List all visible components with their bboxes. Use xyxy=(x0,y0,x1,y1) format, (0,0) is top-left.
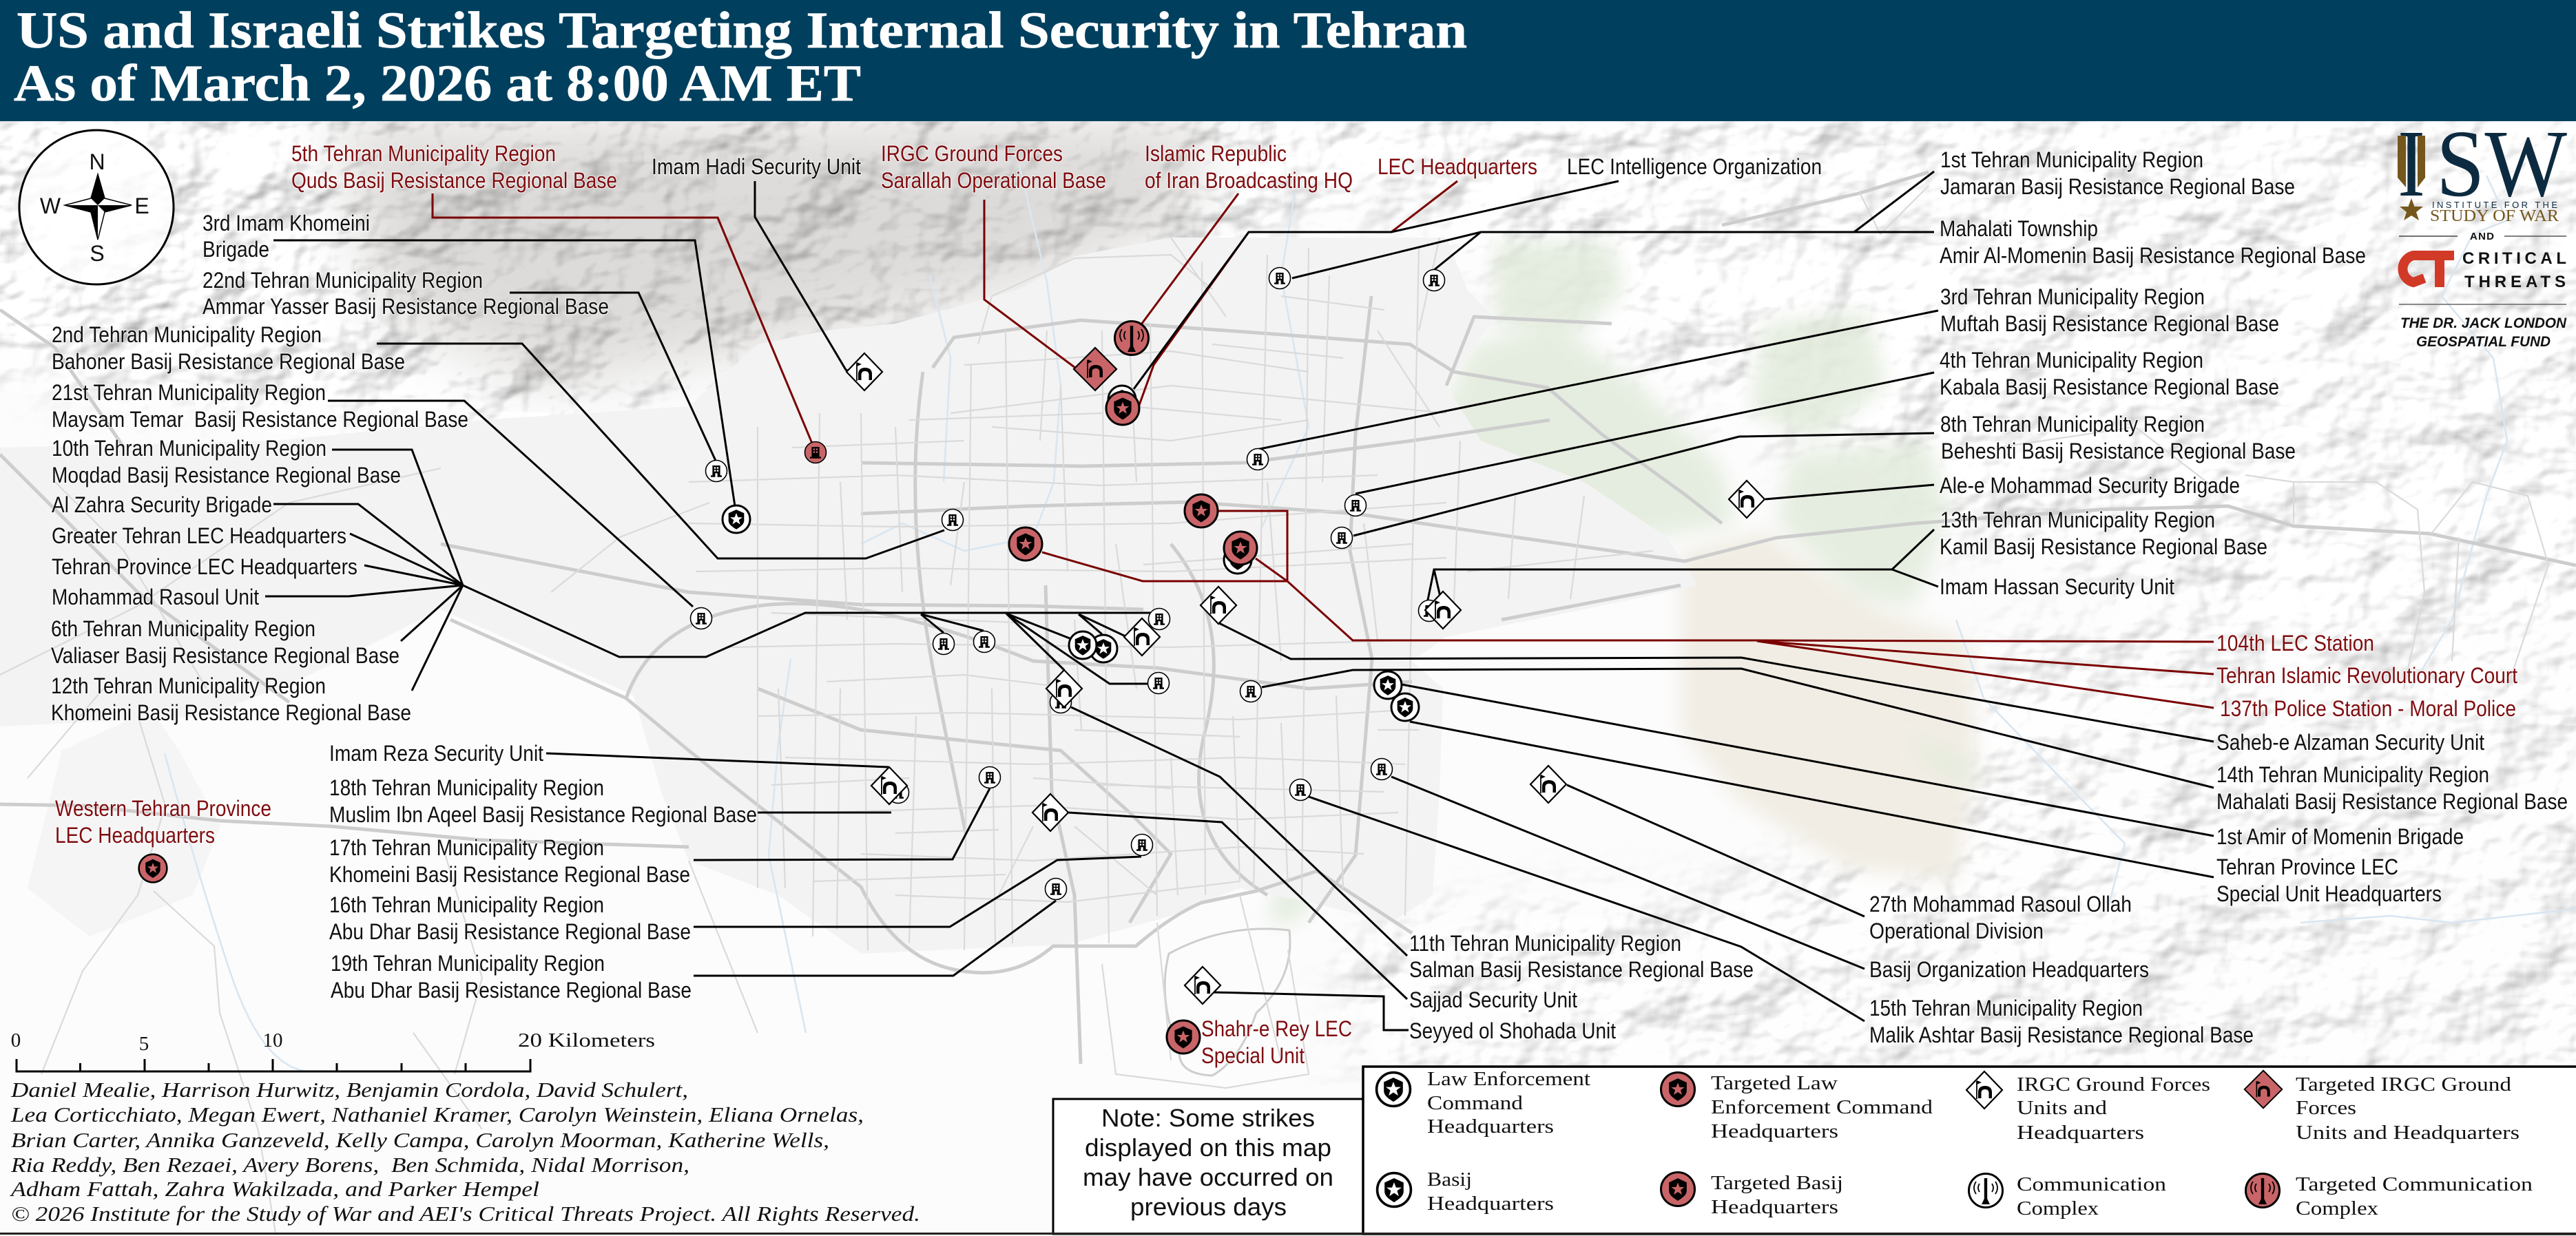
label: 27th: 27th Mohammad Rasoul Ollah xyxy=(1869,892,2132,916)
title xyxy=(14,2,1467,112)
label: 10th: 10th Tehran Municipality Region xyxy=(52,436,326,461)
note box: previous days xyxy=(1130,1193,1287,1221)
leader: Sajjad xyxy=(1068,813,1407,999)
legend item: targeted basij: Headquarters xyxy=(1711,1196,1838,1218)
label: 1st Amir: 1st Amir of Momenin Brigade xyxy=(2216,824,2464,849)
label: LEC HQ: LEC Headquarters xyxy=(1378,154,1537,179)
label: 12th: 12th Tehran Municipality Region xyxy=(51,673,326,698)
icon: targeted communication xyxy=(1114,321,1149,355)
credits: Adham Fattah, Zahra Wakilzada, and Parker Hempel xyxy=(10,1177,539,1201)
legend xyxy=(1363,1067,2576,1234)
leaders: 1st Jamaran and Mahalati Township xyxy=(1292,171,1934,278)
label: 13th Kamil: 13th Tehran Municipality Region xyxy=(1940,507,2215,532)
legend item: law enforcement xyxy=(1377,1068,1590,1138)
legend item: targeted communication: Targeted Communication xyxy=(2296,1173,2533,1195)
label: Mohammad Rasoul: Mohammad Rasoul Unit xyxy=(52,585,259,609)
legend item: law enforcement: Law Enforcement xyxy=(1427,1068,1590,1090)
legend item: targeted basij: Targeted Basij xyxy=(1711,1172,1843,1194)
leader: 5th Tehran Municipality Region xyxy=(433,193,813,445)
label: 1st Jamaran xyxy=(1940,147,2295,199)
title: As of March 2, 2026 at 8:00 AM ET xyxy=(14,55,861,112)
credits: © 2026 Institute for the Study of War and AEI's Critical Threats Project. All Rights Reserved. xyxy=(11,1202,920,1226)
label: 13th Kamil xyxy=(1940,507,2267,559)
leader: Ale-e Mohammad xyxy=(1765,485,1934,499)
compass xyxy=(19,130,174,284)
note box: may have occurred on xyxy=(1083,1163,1333,1191)
label: Shahr-e Rey: Special Unit xyxy=(1201,1043,1305,1068)
label: 19th: Abu Dhar Basij Resistance Regional Base xyxy=(331,978,692,1003)
leader: central trunk xyxy=(463,585,1152,684)
label: 10th xyxy=(52,436,401,488)
label: IRGC Sarallah: Sarallah Operational Base xyxy=(881,168,1106,193)
logo: ISW: STUDY OF WAR xyxy=(2430,207,2559,225)
label: Seyyed: Seyyed ol Shohada Unit xyxy=(1409,1018,1616,1043)
label: 21st: Maysam Temar Basij Resistance Regional Base xyxy=(52,407,468,432)
label: 4th Kabala: Kabala Basij Resistance Regional Base xyxy=(1940,375,2279,399)
label: LEC Intelligence: LEC Intelligence Organization xyxy=(1567,154,1822,179)
scale bar: 0 xyxy=(11,1029,21,1051)
label: 21st: 21st Tehran Municipality Region xyxy=(52,380,326,405)
note box: Note: Some strikes xyxy=(1101,1104,1315,1132)
credits: Daniel Mealie, Harrison Hurwitz, Benjamin Cordola, David Schulert, xyxy=(10,1078,688,1102)
leader: 17th xyxy=(694,788,990,860)
legend item: targeted law enforcement xyxy=(1661,1072,1933,1142)
label: 14th xyxy=(2216,762,2568,814)
leader: Province LEC Special Unit xyxy=(1410,722,2214,877)
label: Broadcasting xyxy=(1145,141,1353,193)
label: 2nd xyxy=(52,322,405,374)
compass: W xyxy=(40,193,61,218)
label: Greater Tehran: Greater Tehran LEC Headquarters xyxy=(52,523,346,548)
label: 21st xyxy=(52,380,468,432)
label: 22nd: 22nd Tehran Municipality Region xyxy=(202,268,483,293)
label: Broadcasting: of Iran Broadcasting HQ xyxy=(1145,168,1353,193)
legend item: basij: Basij xyxy=(1427,1169,1472,1191)
labels: east xyxy=(1201,147,2568,1068)
main roads xyxy=(0,172,2576,1076)
leader: 19th xyxy=(694,901,1056,976)
scale bar: 10 xyxy=(263,1029,282,1051)
leader: Broadcasting HQ xyxy=(1141,193,1238,324)
leader: 3rd Muftah xyxy=(1256,311,1938,450)
logo: Critical Threats xyxy=(2399,249,2566,304)
leader: 22nd xyxy=(510,293,716,461)
leader: 14th Mahalati xyxy=(1262,669,2214,788)
label: 1st Jamaran: Jamaran Basij Resistance Regional Base xyxy=(1940,174,2295,199)
label: Court: Tehran Islamic Revolutionary Court xyxy=(2216,663,2517,688)
label: 3rd Imam Khomeini xyxy=(202,211,370,262)
labels: west xyxy=(51,211,757,1003)
logo: ISW xyxy=(2398,111,2567,225)
leader: 3rd Imam Khomeini xyxy=(273,240,735,506)
label: Mahalati Township: Amir Al-Momenin Basij Resistance Regional Base xyxy=(1940,243,2366,268)
labels: north xyxy=(291,141,1822,193)
label: 12th: Khomeini Basij Resistance Regional Base xyxy=(51,700,411,725)
label: 5th Quds Basij: 5th Tehran Municipality Region xyxy=(291,141,556,166)
note box: displayed on this map xyxy=(1085,1133,1331,1162)
label: 8th Beheshti: Beheshti Basij Resistance Regional Base xyxy=(1941,439,2296,463)
label: 13th Kamil: Kamil Basij Resistance Regional Base xyxy=(1940,534,2267,559)
legend item: IRGC: IRGC Ground Forces xyxy=(2017,1073,2210,1096)
header bar xyxy=(0,0,2576,121)
logo: ISW: I xyxy=(2398,111,2425,217)
icon: buildings xyxy=(690,267,1445,899)
leader: Imam Reza xyxy=(546,753,889,767)
label: Broadcasting: Islamic Republic xyxy=(1145,141,1287,166)
credits: Ria Reddy, Ben Rezaei, Avery Borens, Ben Schmida, Nidal Morrison, xyxy=(10,1153,689,1177)
leader: 2nd xyxy=(377,344,944,558)
legend item: IRGC xyxy=(1966,1071,2210,1144)
label: Sajjad: Sajjad Security Unit xyxy=(1409,987,1577,1012)
label: 17th: 17th Tehran Municipality Region xyxy=(329,835,604,860)
icon: white shields xyxy=(723,386,1419,721)
legend item: law enforcement: Headquarters xyxy=(1427,1115,1554,1138)
logos xyxy=(2398,111,2567,350)
label: 10th: Moqdad Basij Resistance Regional Base xyxy=(52,463,401,488)
city built-up area xyxy=(0,238,1698,954)
leader: 1st Amir of Momenin xyxy=(1402,684,2214,836)
label: 17th xyxy=(329,835,690,887)
label: 6th: Valiaser Basij Resistance Regional Base xyxy=(51,643,399,668)
logo: Jack London fund: GEOSPATIAL FUND xyxy=(2416,334,2551,350)
label: Mahalati Township xyxy=(1940,216,2366,268)
label: Mahalati Township: Mahalati Township xyxy=(1940,216,2098,241)
label: 3rd Muftah xyxy=(1940,284,2279,336)
compass: N xyxy=(89,149,105,174)
leader lines xyxy=(265,171,2214,1030)
label: 5th Quds Basij xyxy=(291,141,617,193)
legend item: targeted IRGC: Targeted IRGC Ground xyxy=(2296,1073,2512,1096)
leaders: 13th Kamil and Imam Hassan xyxy=(1426,530,1938,609)
map markers xyxy=(139,267,1765,1054)
legend item: communication xyxy=(1969,1173,2167,1219)
logo: ISW: SW xyxy=(2436,111,2567,217)
legend item: targeted IRGC: Units and Headquarters xyxy=(2296,1122,2520,1144)
label: 15th: 15th Tehran Municipality Region xyxy=(1869,996,2143,1020)
label: 11th: 11th Tehran Municipality Region xyxy=(1409,931,1681,956)
leader: LEC Headquarters xyxy=(1139,181,1457,407)
label: Western Tehran: Western Tehran Province xyxy=(55,796,271,821)
label: 19th: 19th Tehran Municipality Region xyxy=(331,951,605,976)
label: Tehran Province: Tehran Province LEC Headquarters xyxy=(52,554,357,579)
legend item: targeted law enforcement: Enforcement Command xyxy=(1711,1096,1933,1118)
label: 4th Kabala xyxy=(1940,348,2279,399)
vegetation patches xyxy=(551,241,1984,923)
label: 12th xyxy=(51,673,411,725)
rivers xyxy=(165,165,2576,1071)
label: 11th: Salman Basij Resistance Regional Base xyxy=(1409,957,1754,982)
label: 16th: Abu Dhar Basij Resistance Regional Base xyxy=(329,919,691,944)
scale bar: 20 Kilometers xyxy=(518,1029,655,1051)
label: 6th xyxy=(51,616,399,668)
label: 27th xyxy=(1869,892,2132,943)
credits xyxy=(10,1078,920,1226)
title: US and Israeli Strikes Targeting Internal Security in Tehran xyxy=(17,2,1467,59)
label: Shahr-e Rey xyxy=(1201,1016,1352,1068)
label: 18th: Muslim Ibn Aqeel Basij Resistance Regional Base xyxy=(329,802,757,827)
label: 3rd Imam Khomeini: Brigade xyxy=(202,237,269,262)
leader: Imam Hadi xyxy=(755,181,854,373)
tan desert area xyxy=(1295,262,1977,881)
leader: Seyyed ol Shohada xyxy=(1212,992,1409,1030)
logo: Critical Threats: THREATS xyxy=(2464,273,2566,291)
leader: 16th xyxy=(694,857,1141,927)
label: Saheb-e: Saheb-e Alzaman Security Unit xyxy=(2216,730,2484,755)
label: Province LEC Special Unit xyxy=(2216,855,2442,906)
legend item: IRGC: Headquarters xyxy=(2017,1122,2144,1144)
label: IRGC Sarallah xyxy=(881,141,1106,193)
legend item: targeted communication xyxy=(2245,1173,2533,1219)
label: Imam Hadi: Imam Hadi Security Unit xyxy=(652,154,861,179)
label: 19th xyxy=(331,951,692,1003)
leader: LEC Intelligence Organization xyxy=(1134,181,1619,389)
leaders: west hub xyxy=(265,450,463,691)
logo: Critical Threats: CRITICAL xyxy=(2462,249,2566,268)
leader: 8th Beheshti xyxy=(1353,433,1934,536)
label: 16th xyxy=(329,892,691,944)
label: Province LEC Special Unit: Tehran Province LEC xyxy=(2216,855,2398,879)
legend item: targeted communication: Complex xyxy=(2296,1197,2379,1219)
label: 3rd Imam Khomeini: 3rd Imam Khomeini xyxy=(202,211,370,235)
label: 4th Kabala: 4th Tehran Municipality Region xyxy=(1940,348,2203,373)
label: 2nd: 2nd Tehran Municipality Region xyxy=(52,322,322,347)
icon: targeted IRGC xyxy=(1074,348,1116,390)
logo: Jack London fund: THE DR. JACK LONDON xyxy=(2400,315,2567,331)
legend item: IRGC: Units and xyxy=(2017,1097,2108,1119)
label: 3rd Muftah: 3rd Tehran Municipality Region xyxy=(1940,284,2205,309)
logo: Jack London fund xyxy=(2400,315,2567,350)
leader: Basij Organization xyxy=(1391,777,1865,969)
scale bar xyxy=(11,1029,655,1071)
label: 17th: Khomeini Basij Resistance Regional Base xyxy=(329,862,690,887)
label: 3rd Muftah: Muftah Basij Resistance Regional Base xyxy=(1940,311,2279,336)
note box xyxy=(1053,1099,1363,1234)
label: Ale-e Mohammad: Ale-e Mohammad Security Brigade xyxy=(1940,473,2240,498)
leaders: 104th, court, 137th xyxy=(1042,511,2214,708)
label: 5th Quds Basij: Quds Basij Resistance Regional Base xyxy=(291,168,617,193)
legend item: targeted basij xyxy=(1661,1172,1843,1218)
label: Shahr-e Rey: Shahr-e Rey LEC xyxy=(1201,1016,1352,1041)
label: 1st Jamaran: 1st Tehran Municipality Region xyxy=(1940,147,2203,172)
leader: 27th Division xyxy=(1567,785,1865,916)
leader: 18th xyxy=(758,811,891,814)
legend item: basij xyxy=(1378,1169,1554,1215)
label: 15th: Malik Ashtar Basij Resistance Regional Base xyxy=(1869,1023,2254,1047)
label: 137th: 137th Police Station - Moral Police xyxy=(2220,696,2516,721)
label: 22nd xyxy=(202,268,609,319)
label: 18th xyxy=(329,775,757,827)
label: 14th: 14th Tehran Municipality Region xyxy=(2216,762,2489,787)
logo: and divider: AND xyxy=(2470,231,2494,242)
leader: IRGC Sarallah xyxy=(984,200,1075,368)
legend item: targeted IRGC xyxy=(2245,1071,2520,1144)
compass: S xyxy=(90,241,105,266)
scale bar: 5 xyxy=(139,1033,149,1055)
label: 27th: Operational Division xyxy=(1869,919,2044,943)
label: Western Tehran: LEC Headquarters xyxy=(55,823,215,848)
label: Al Zahra: Al Zahra Security Brigade xyxy=(52,492,272,517)
logo: ISW: INSTITUTE FOR THE xyxy=(2432,200,2557,210)
label: Province LEC Special Unit: Special Unit Headquarters xyxy=(2216,881,2442,906)
label: 15th xyxy=(1869,996,2254,1047)
label: 104th: 104th LEC Station xyxy=(2216,631,2374,656)
icon: IRGC diamonds xyxy=(846,353,1765,1004)
legend item: targeted law enforcement: Headquarters xyxy=(1711,1120,1838,1142)
legend item: targeted law enforcement: Targeted Law xyxy=(1711,1072,1838,1094)
legend item: communication: Communication xyxy=(2017,1173,2167,1195)
leader: 4th Kabala xyxy=(1355,373,1934,494)
leader: 11th Salman xyxy=(1071,707,1407,956)
label: Basij Org: Basij Organization Headquarters xyxy=(1869,957,2149,982)
label: 8th Beheshti xyxy=(1940,412,2296,463)
credits: Lea Corticchiato, Megan Ewert, Nathaniel Kramer, Carolyn Weinstein, Eliana Ornelas, xyxy=(10,1102,864,1127)
legend item: communication: Complex xyxy=(2017,1197,2099,1219)
icon: targeted building 5th xyxy=(804,442,827,463)
leader: Saheb-e Alzaman xyxy=(1219,623,2214,742)
label: 2nd: Bahoner Basij Resistance Regional Base xyxy=(52,349,405,374)
label: 18th: 18th Tehran Municipality Region xyxy=(329,775,604,800)
icon: targeted shields xyxy=(139,392,1257,1054)
credits: Brian Carter, Annika Ganzeveld, Kelly Campa, Carolyn Moorman, Katherine Wells, xyxy=(11,1128,829,1152)
label: 11th xyxy=(1409,931,1754,982)
label: IRGC Sarallah: IRGC Ground Forces xyxy=(881,141,1063,166)
label: Western Tehran xyxy=(55,796,271,848)
label: Imam Hassan: Imam Hassan Security Unit xyxy=(1940,574,2174,599)
label: Imam Reza: Imam Reza Security Unit xyxy=(329,741,543,766)
label: 8th Beheshti: 8th Tehran Municipality Region xyxy=(1940,412,2205,437)
label: 6th: 6th Tehran Municipality Region xyxy=(51,616,315,641)
legend item: basij: Headquarters xyxy=(1427,1193,1554,1215)
compass: E xyxy=(134,193,149,218)
leader: 15th Malik Ashtar xyxy=(1309,797,1865,1021)
legend item: targeted IRGC: Forces xyxy=(2296,1097,2356,1119)
label: 16th: 16th Tehran Municipality Region xyxy=(329,892,604,917)
label: 22nd: Ammar Yasser Basij Resistance Regional Base xyxy=(202,294,609,319)
leader: 21st xyxy=(328,401,693,607)
legend item: law enforcement: Command xyxy=(1427,1092,1524,1114)
